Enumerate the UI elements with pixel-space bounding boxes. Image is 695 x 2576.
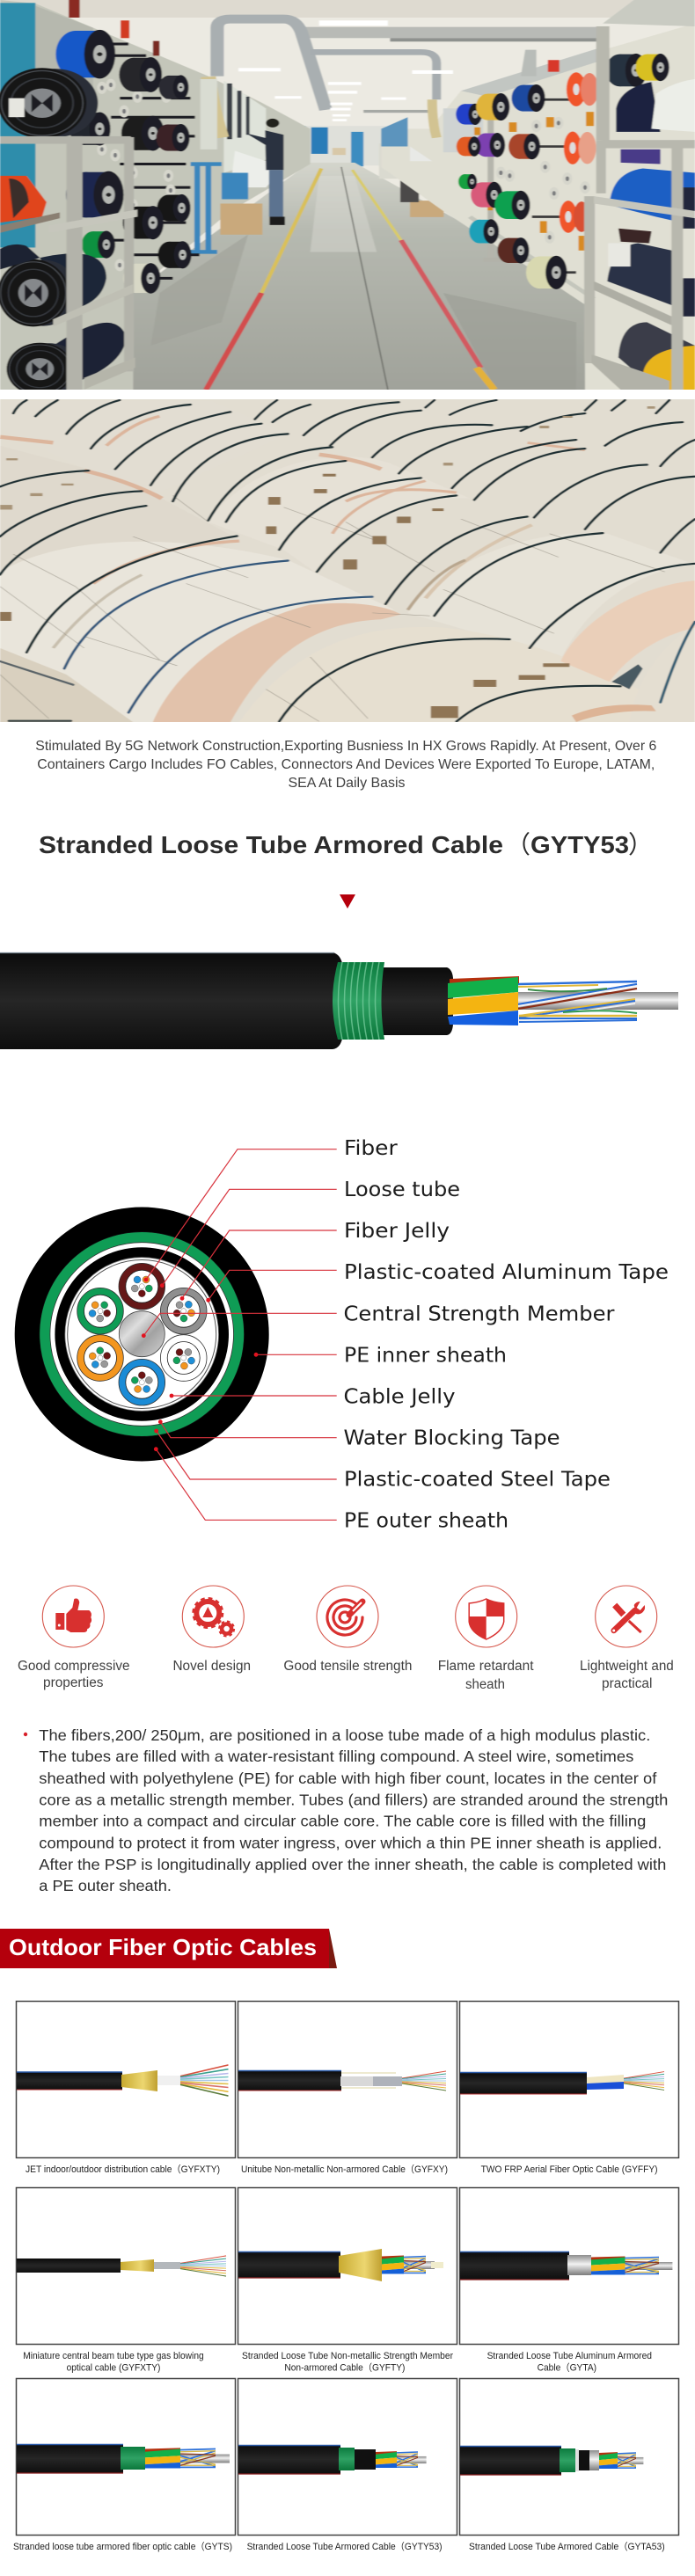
aluminium tape [65, 1258, 218, 1411]
cross-section labels [343, 1135, 669, 1532]
feature: flame retardant sheath: Flame retardant [438, 1659, 534, 1674]
caption: Stranded Loose Tube Non-metallic Strength Member [242, 2351, 453, 2361]
feature: good compressive properties: Good compressive [18, 1659, 130, 1674]
product card: GYFFY aerial cable [459, 2002, 679, 2175]
product card: GYFTY cable [238, 2188, 457, 2373]
cross-section labels: Central Strength Member [343, 1302, 615, 1326]
product card: GYTA cable [459, 2188, 679, 2373]
feature: novel design: Novel design [172, 1659, 251, 1674]
cross-section labels: Fiber [344, 1135, 398, 1160]
cross-section labels: PE outer sheath [344, 1507, 508, 1532]
icon: gears [182, 1586, 244, 1647]
plank seams [0, 495, 665, 721]
description paragraph: sheathed with polyethylene (PE) for cable with high fiber count, locates in the center of [39, 1770, 656, 1787]
cross-section labels: Cable Jelly [343, 1384, 456, 1409]
description paragraph: compound to protect it from water ingress, over which a thin PE inner sheath is applied. [39, 1835, 662, 1852]
cross-section labels: Plastic-coated Steel Tape [344, 1467, 611, 1492]
left machine wall [0, 0, 311, 390]
product card: GYFXTY miniature cable [16, 2188, 236, 2373]
feature: novel design [172, 1586, 251, 1674]
cross-section labels: PE inner sheath [344, 1342, 507, 1367]
feature: good tensile strength: Good tensile strength [283, 1659, 412, 1674]
steel tape ring [40, 1232, 245, 1436]
caption: JET indoor/outdoor distribution cable（GYFXTY) [26, 2164, 220, 2175]
icon: target and pencil [317, 1586, 378, 1647]
feature: lightweight and practical [580, 1586, 674, 1691]
product card: GYFXTY distribution cable [16, 2002, 236, 2175]
title: GYTY53 [530, 831, 629, 858]
intro text: SEA At Daily Basis [289, 776, 405, 791]
banner heading: Outdoor Fiber Optic Cables [9, 1934, 317, 1960]
caption: Miniature central beam tube type gas blowing [23, 2351, 204, 2361]
section banner [0, 1929, 337, 1968]
green armour tape [333, 962, 384, 1040]
feature: lightweight and practical: practical [602, 1676, 652, 1691]
leader dots [142, 1278, 258, 1451]
icon: shield [456, 1586, 517, 1647]
tonal barrels [0, 402, 288, 499]
left axles and discs [89, 44, 200, 278]
central strength member [119, 1311, 165, 1357]
caption: optical cable (GYFXTY) [67, 2362, 160, 2373]
steel straps [0, 400, 695, 721]
cross-section labels: Water Blocking Tape [343, 1425, 560, 1449]
right metal shelves [584, 26, 695, 390]
feature: flame retardant sheath: sheath [465, 1677, 505, 1692]
description paragraph: core as a metallic strength member. Tubes (and fillers) are stranded around the strength [39, 1791, 668, 1808]
right machine wall [381, 24, 695, 390]
caption [23, 2351, 204, 2373]
feature: good compressive properties [18, 1586, 130, 1690]
intro text: Stimulated By 5G Network Construction,Exporting Busniess In HX Grows Rapidly. At Present, Over 6 [35, 739, 656, 754]
outer sheath ring [15, 1207, 269, 1462]
caption: Non-armored Cable（GYFTY) [284, 2362, 405, 2373]
photo: stacked wooden cable drums [0, 399, 695, 722]
inner sheath [381, 967, 453, 1035]
feature: flame retardant sheath [438, 1586, 534, 1692]
product card: GYTA53 cable [459, 2378, 679, 2552]
product card: GYTS cable [13, 2378, 236, 2552]
cross-section labels: Loose tube [344, 1177, 460, 1201]
outer sheath [0, 952, 343, 1049]
title: ） [628, 831, 653, 858]
cardboard boxes [220, 203, 262, 235]
description paragraph: a PE outer sheath. [39, 1877, 172, 1894]
product card: GYTY53 cable [238, 2378, 457, 2552]
title: Stranded Loose Tube Armored Cable [39, 831, 503, 858]
description paragraph: member into a compact and circular cable core. The cable core is filled with the filling [39, 1812, 646, 1829]
product card: GYFXY unitube cable [238, 2002, 457, 2175]
description paragraph: The tubes are filled with a water-resistant filling compound. A steel wire, sometimes [39, 1748, 634, 1765]
caption: Stranded Loose Tube Aluminum Armored [487, 2351, 652, 2361]
caption: TWO FRP Aerial Fiber Optic Cable (GYFFY) [481, 2164, 658, 2175]
left spools [55, 30, 115, 78]
caption [242, 2351, 453, 2373]
branded marks [0, 474, 569, 718]
floor [133, 163, 585, 390]
caption: Stranded Loose Tube Armored Cable（GYTA53) [469, 2541, 665, 2552]
inner sheath ring [55, 1247, 229, 1421]
caption: Stranded loose tube armored fiber optic cable（GYTS) [13, 2541, 232, 2552]
description paragraph: The fibers,200/ 250μm, are positioned in a loose tube made of a high modulus plastic. [39, 1726, 650, 1744]
description paragraph: After the PSP is longitudinally applied over the inner sheath, the cable is completed with [39, 1856, 666, 1873]
intro text: Containers Cargo Includes FO Cables, Connectors And Devices Were Exported To Europe, LATAM, [37, 757, 655, 772]
icon: thumbs up [42, 1586, 104, 1647]
cross-section labels: Plastic-coated Aluminum Tape [344, 1259, 669, 1284]
water blocking tape [50, 1243, 234, 1426]
coloured loose tubes [448, 976, 519, 1025]
caption [487, 2351, 652, 2373]
cable cross-section diagram [15, 1149, 337, 1520]
intro text [35, 739, 656, 791]
feature: good tensile strength [283, 1586, 412, 1674]
operator [265, 130, 283, 170]
leader lines [143, 1149, 337, 1520]
icon: wrench and screwdriver [596, 1586, 657, 1647]
description paragraph [24, 1726, 668, 1894]
icon: red down triangle [340, 894, 355, 909]
caption: Unitube Non-metallic Non-armored Cable（GYFXY) [241, 2164, 448, 2175]
feature: lightweight and practical: Lightweight and [580, 1659, 674, 1674]
caption: Stranded Loose Tube Armored Cable（GYTY53) [247, 2541, 443, 2552]
fibers and central rod [518, 982, 678, 1022]
loose tubes [77, 1263, 207, 1405]
cable side view illustration [0, 952, 678, 1049]
cross-section labels: Fiber Jelly [344, 1218, 450, 1243]
title: （ [506, 831, 530, 858]
caption: Cable（GYTA) [538, 2362, 596, 2373]
wood flange faces [153, 603, 401, 722]
photo: fiber optic cable factory aisle [0, 0, 695, 390]
left metal shelves [0, 136, 134, 390]
bullet [24, 1733, 27, 1736]
feature: good compressive properties: properties [43, 1675, 104, 1690]
